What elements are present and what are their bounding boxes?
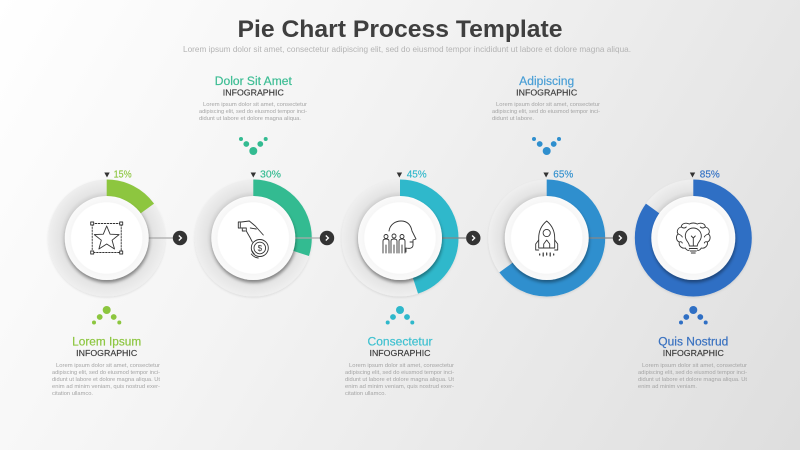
subheading: INFOGRAPHIC — [76, 348, 137, 358]
body text: didunt ut labore et dolore magna aliqua. Ut — [52, 377, 160, 383]
arc 65% — [497, 188, 597, 288]
step 4: dots — [532, 137, 561, 155]
label 65%: 65% — [553, 168, 573, 180]
arrow button 2 — [320, 231, 334, 245]
step 4: text block Adipiscing — [492, 76, 600, 122]
step 3: text block Consectetur — [345, 336, 454, 397]
body text: adipiscing elit, sed do eiusmod tempor inci- — [199, 109, 307, 115]
body text — [199, 102, 307, 122]
body text: didunt ut labore et dolore magna aliqua. Ut — [638, 377, 747, 383]
pie 2: 30% — [195, 180, 321, 296]
body text: Lorem ipsum dolor sit amet, consectetur — [496, 102, 600, 108]
disc — [358, 196, 442, 280]
heading: Quis Nostrud — [658, 336, 728, 348]
connector line — [291, 237, 321, 239]
arc 30% — [203, 188, 303, 288]
subheading: INFOGRAPHIC — [370, 348, 430, 358]
subheading: INFOGRAPHIC — [516, 88, 577, 98]
heading: Dolor Sit Amet — [215, 76, 293, 88]
heading: Lorem Ipsum — [72, 336, 141, 348]
disc — [651, 196, 735, 280]
label 65% — [543, 168, 573, 180]
pie 3: 45% — [342, 180, 466, 296]
label 45%: 45% — [407, 168, 427, 180]
subheading: INFOGRAPHIC — [223, 88, 284, 98]
arrow button 3 — [466, 231, 480, 245]
body text: enim ad minim veniam, quis nostrud exer- — [52, 384, 160, 390]
title: Pie Chart Process Template — [238, 16, 562, 43]
subtitle: Lorem ipsum dolor sit amet, consectetur adipiscing elit, sed do eiusmod tempor incididunt ut labore et dolore magna aliqua. — [183, 44, 631, 54]
icon: brain with light bulb — [676, 223, 710, 253]
label 30%: 30% — [260, 168, 281, 180]
disc — [65, 196, 149, 280]
pie 5: 85% — [635, 180, 752, 296]
label 85%: 85% — [700, 168, 720, 180]
step 5: text block Quis Nostrud — [638, 336, 747, 390]
body text — [638, 363, 747, 390]
pie 1: 15% — [48, 180, 175, 296]
heading: Consectetur — [368, 336, 433, 348]
body text: Lorem ipsum dolor sit amet, consectetur — [56, 363, 160, 369]
body text — [492, 102, 600, 122]
body text: citation ullamco. — [52, 391, 93, 397]
step 5: dots — [679, 306, 708, 324]
arrow button 1 — [173, 231, 187, 245]
body text: didunt ut labore et dolore magna aliqua. — [199, 116, 301, 122]
icon: rocket — [536, 221, 558, 256]
body text: adipiscing elit, sed do eiusmod tempor inci- — [492, 109, 600, 115]
arc 85% — [643, 188, 743, 288]
body text — [52, 363, 160, 397]
step 2: text block Dolor Sit Amet — [199, 76, 307, 122]
body text: adipiscing elit, sed do eiusmod tempor inci- — [52, 370, 160, 376]
disc — [505, 196, 589, 280]
body text — [345, 363, 454, 397]
label 15% — [104, 168, 132, 180]
step 1: dots — [92, 306, 121, 324]
pie 4: 65% — [488, 180, 615, 296]
icon: head with people — [383, 221, 416, 253]
arc 45% — [350, 188, 450, 288]
step 3: dots — [386, 306, 414, 324]
connector line — [438, 237, 466, 239]
arrow button 4 — [613, 231, 627, 245]
body text: didunt ut labore. — [492, 116, 534, 122]
label 45% — [397, 168, 427, 180]
label 85% — [690, 168, 720, 180]
arc 15% — [57, 188, 157, 288]
subheading: INFOGRAPHIC — [663, 348, 724, 358]
body text: adipiscing elit, sed do eiusmod tempor inci- — [345, 370, 454, 376]
body text: enim ad minim veniam. — [638, 384, 697, 390]
body text: didunt ut labore et dolore magna aliqua. Ut — [345, 377, 454, 383]
step 2: dots — [239, 137, 268, 155]
body text: Lorem ipsum dolor sit amet, consectetur — [642, 363, 747, 369]
body text: enim ad minim veniam, quis nostrud exer- — [345, 384, 454, 390]
connector line — [585, 237, 615, 239]
heading: Adipiscing — [519, 76, 574, 88]
body text: Lorem ipsum dolor sit amet, consectetur — [203, 102, 307, 108]
disc — [211, 196, 295, 280]
body text: citation ullamco. — [345, 391, 386, 397]
icon: star in selection frame — [91, 222, 123, 254]
label 30% — [251, 168, 281, 180]
connector line — [145, 237, 175, 239]
icon: hand with coin: $ — [258, 244, 263, 253]
body text: Lorem ipsum dolor sit amet, consectetur — [349, 363, 454, 369]
body text: adipiscing elit, sed do eiusmod tempor inci- — [638, 370, 747, 376]
step 1: text block Lorem Ipsum — [52, 336, 160, 397]
label 15%: 15% — [114, 168, 132, 180]
